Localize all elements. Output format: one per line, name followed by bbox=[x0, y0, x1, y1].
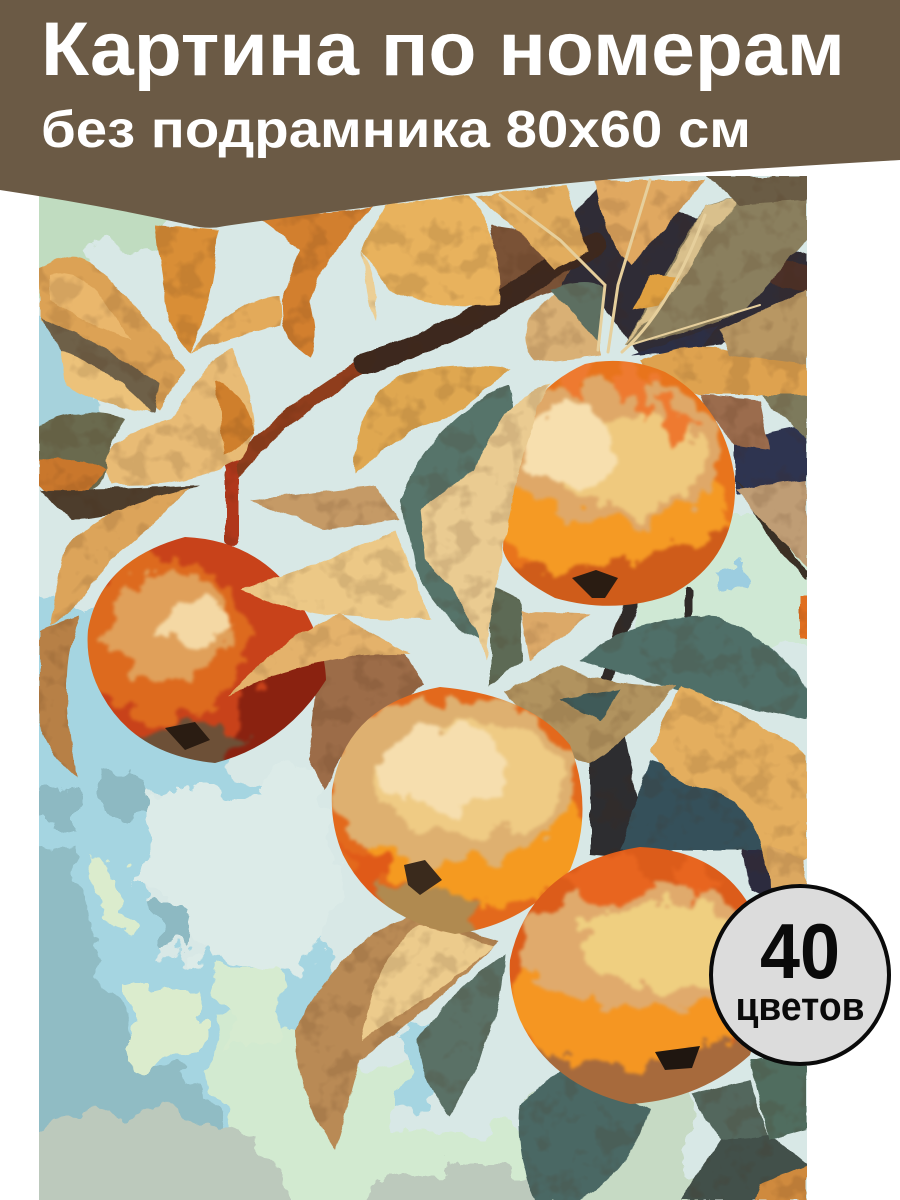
badge number: 40 bbox=[760, 907, 840, 995]
calyx bbox=[165, 722, 210, 750]
sky background bbox=[39, 176, 807, 1200]
calyx bbox=[572, 570, 618, 598]
apple: centre bbox=[332, 687, 582, 934]
apple: bottom right bbox=[510, 847, 751, 1104]
leaves over left apple bbox=[228, 530, 430, 695]
painting: apples on a branch bbox=[39, 176, 807, 1200]
apple: top right bbox=[503, 360, 736, 606]
leaves: top left cluster bbox=[39, 208, 372, 778]
banner shape bbox=[0, 0, 900, 228]
leaf over top right apple bbox=[420, 385, 550, 660]
leaves: bottom cluster bbox=[295, 915, 807, 1200]
leaf veins and stems bbox=[500, 180, 760, 352]
dark foliage backing bbox=[490, 185, 807, 900]
branch bbox=[232, 245, 815, 685]
badge: 40 colours bbox=[711, 886, 889, 1064]
subtitle: без подрамника 80х60 см bbox=[41, 101, 751, 159]
header banner bbox=[0, 0, 900, 228]
leaves: top centre and right cluster bbox=[355, 176, 815, 640]
leaves: centre cluster bbox=[250, 385, 807, 888]
title: Картина по номерам bbox=[41, 7, 845, 92]
apple: left bbox=[88, 537, 326, 763]
badge label: цветов bbox=[736, 985, 864, 1029]
calyx bbox=[404, 860, 442, 895]
calyx bbox=[655, 1046, 700, 1070]
